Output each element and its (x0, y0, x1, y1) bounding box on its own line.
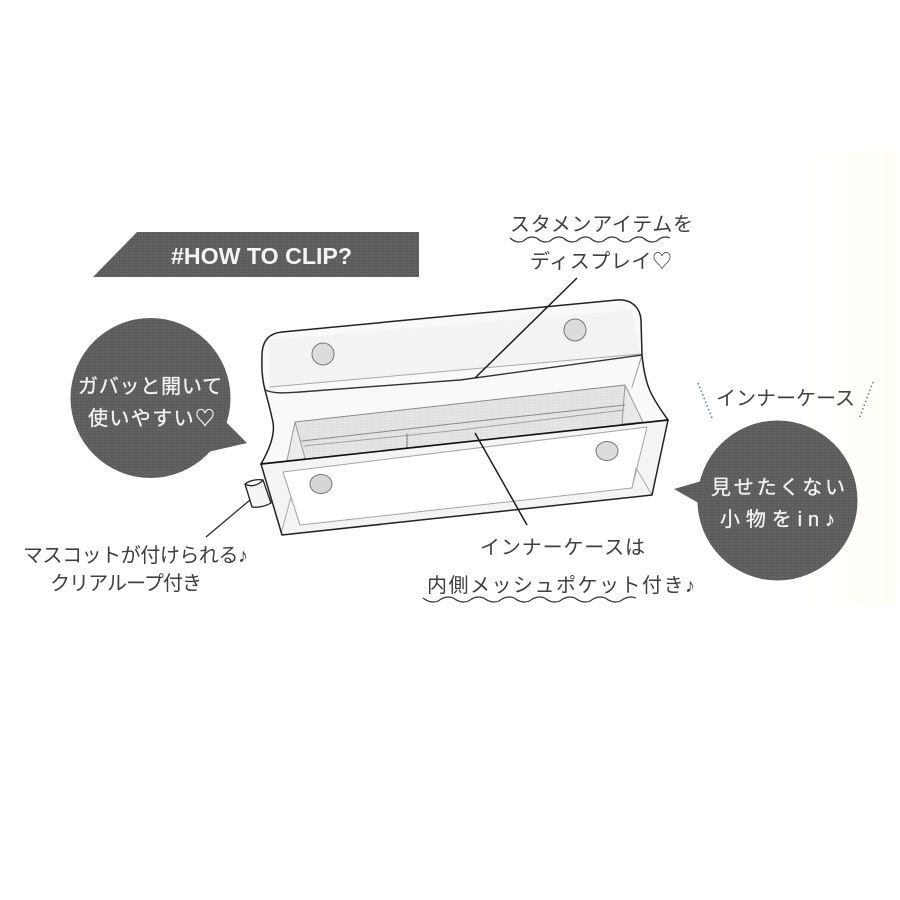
background tint (800, 150, 897, 606)
left speech bubble: 使いやすい♡ (88, 407, 215, 430)
inner case seam upper (302, 405, 625, 441)
front pocket (283, 427, 647, 525)
clear loop (245, 480, 271, 507)
left speech bubble (70, 318, 247, 478)
callout: display items (510, 213, 693, 273)
callout: mesh pocket (423, 537, 695, 602)
flap fold (265, 355, 642, 393)
inner case back wall (295, 385, 625, 458)
snap top right (564, 319, 586, 341)
callout: mesh pocket: 内側メッシュポケット付き♪ (427, 574, 695, 597)
inner case side gusset right (622, 385, 643, 424)
right speech bubble (674, 420, 858, 580)
callout: inner case heading: インナーケース (716, 388, 855, 410)
right flap gusset (632, 355, 642, 387)
right speech bubble: 小物をin♪ (720, 508, 835, 531)
pouch outline (261, 300, 668, 535)
callout: display items: ディスプレイ♡ (530, 250, 672, 273)
flap shading (268, 310, 640, 387)
flap seam (270, 354, 640, 387)
snap bottom right (596, 442, 618, 460)
callout: mascot loop: クリアループ付き (50, 572, 202, 595)
leader: inner case (475, 433, 527, 525)
snap bottom left (310, 474, 332, 494)
callout: mesh pocket: インナーケースは (480, 537, 645, 559)
front gusset right (632, 468, 652, 495)
callout: mascot loop: マスコットが付けられる♪ (23, 544, 248, 567)
flap panel (261, 300, 668, 464)
right speech bubble: 見せたくない (711, 477, 845, 499)
pouch illustration (245, 300, 668, 535)
leader: clear loop (206, 500, 250, 537)
title banner: #HOW TO CLIP? (171, 243, 352, 269)
leader: display items (475, 278, 577, 378)
snap top left (312, 343, 334, 365)
callout: inner case heading (698, 382, 873, 419)
inner case side gusset left (285, 422, 305, 470)
left speech bubble: ガバッと開いて (78, 375, 222, 398)
title banner (93, 232, 419, 277)
front panel (261, 420, 668, 535)
callout: display items: スタメンアイテムを (510, 213, 693, 236)
inner case seam lower (304, 410, 624, 446)
front top edge (261, 420, 668, 464)
callout: mascot loop (23, 544, 248, 595)
inner case divider (406, 434, 408, 457)
inner case top edge (295, 385, 625, 422)
front gusset left (281, 472, 300, 534)
